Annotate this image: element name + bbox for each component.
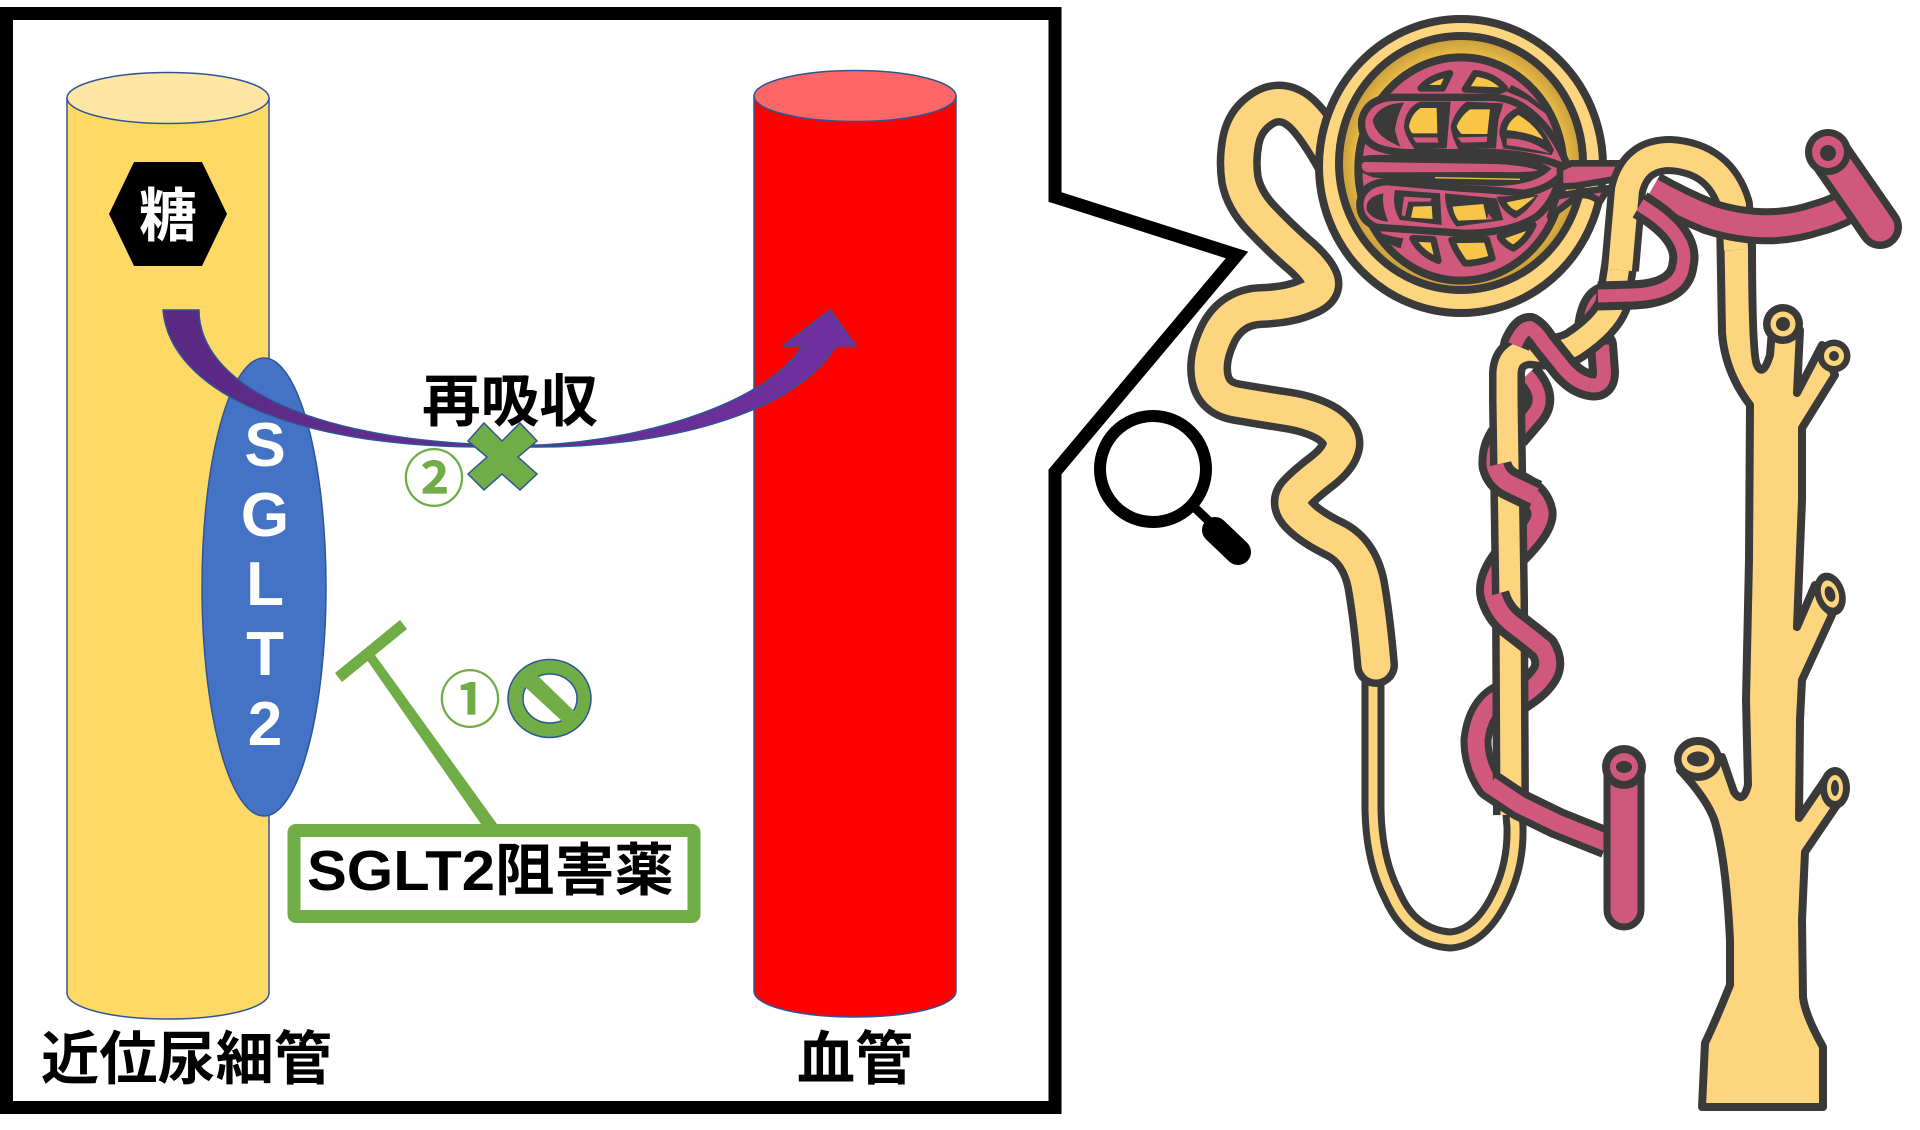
- drug label box: SGLT2阻害薬: [307, 839, 674, 903]
- SGLT2 transporter: 2: [248, 690, 282, 759]
- label: proximal tubule: 近位尿細管: [41, 1027, 332, 1092]
- sugar hexagon: 糖: [139, 184, 197, 249]
- nephron illustration: [1209, 19, 1880, 1107]
- upper capillary lobe: [1362, 97, 1567, 167]
- proximal convoluted tubule: [1209, 104, 1376, 665]
- SGLT2 transporter: T: [246, 620, 284, 689]
- vasa recta: back segments: [1476, 205, 1684, 843]
- efferent arteriole: [1652, 129, 1880, 227]
- glomerular capsule: [1319, 19, 1603, 313]
- arteriole stub: [1602, 745, 1646, 910]
- marker: circled 1: ①: [439, 667, 501, 736]
- cylinder: blood vessel: [754, 70, 956, 1017]
- cylinder: proximal tubule: [67, 72, 269, 1019]
- glomerulus capillary tuft: [1355, 57, 1627, 281]
- afferent and efferent stem: [1550, 163, 1627, 217]
- collecting duct: [1674, 215, 1851, 1107]
- label: reabsorption: 再吸収: [422, 370, 598, 434]
- reabsorption arrow: [163, 310, 856, 447]
- callout frame: [6, 14, 1237, 1108]
- label: blood vessel: 血管: [797, 1027, 913, 1092]
- sugar hexagon: [109, 162, 227, 266]
- distal tubule: [1507, 155, 1736, 815]
- peritubular branch crossing: [1598, 205, 1684, 296]
- central capillary: [1355, 153, 1552, 186]
- SGLT2 transporter: G: [241, 481, 289, 550]
- marker: circled 2: ②: [403, 446, 465, 515]
- SGLT2 transporter: S: [244, 411, 286, 480]
- icon: magnifying glass: [1100, 416, 1238, 552]
- duct openings: [1674, 304, 1851, 809]
- SGLT2 transporter: [202, 358, 326, 816]
- vasa recta: front crossings: [1490, 328, 1607, 843]
- lower capillary lobe: [1360, 177, 1560, 233]
- icon: prohibition sign: [508, 660, 591, 738]
- inhibition line: [335, 620, 497, 824]
- SGLT2 transporter: L: [246, 550, 284, 619]
- drug label box: [294, 830, 694, 916]
- loop of Henle: thin limb: [1373, 670, 1515, 940]
- icon: green cross mark: [468, 423, 537, 490]
